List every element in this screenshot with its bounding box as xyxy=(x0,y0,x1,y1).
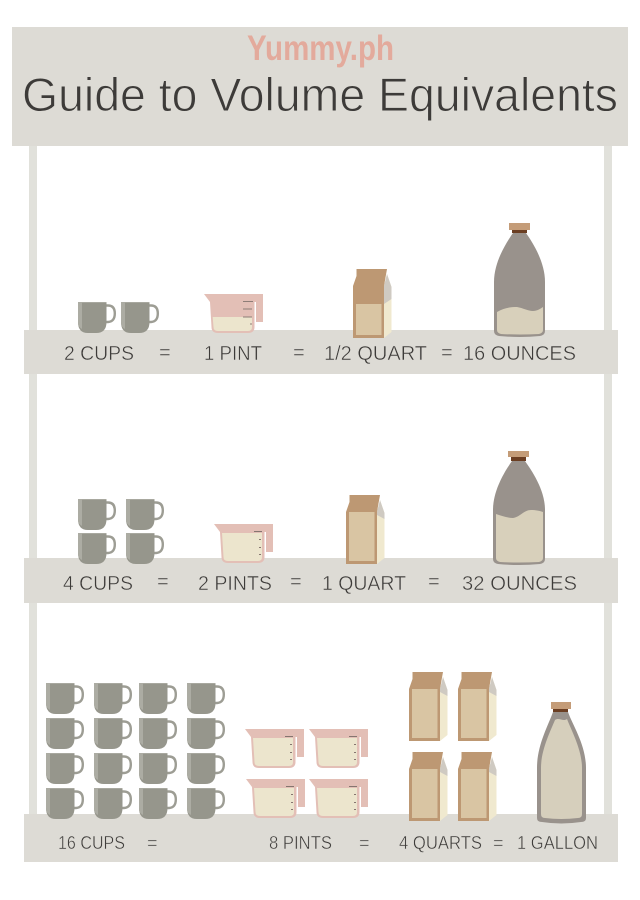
icon: 4 cups xyxy=(78,499,163,564)
title: Guide to Volume Equivalents xyxy=(22,68,618,121)
icon: quart carton xyxy=(346,495,384,564)
icon: bottle with 16 ounces xyxy=(494,223,545,337)
shelf post: left xyxy=(29,146,37,862)
equation row 3: = xyxy=(147,833,158,853)
equation row 3: 16 CUPS xyxy=(58,833,125,853)
equation row 2: = xyxy=(290,571,302,593)
equation row 1: 16 OUNCES xyxy=(463,343,576,365)
equation row 2: = xyxy=(428,571,440,593)
equation row 1 xyxy=(64,342,576,365)
icon: 2 cups xyxy=(78,302,158,333)
equation row 3: 8 PINTS xyxy=(269,833,332,853)
equation row 3 xyxy=(58,833,598,853)
icon: 16 cups xyxy=(46,683,224,819)
panel: header xyxy=(12,27,628,146)
icon: pint measuring jug xyxy=(204,294,263,333)
equation row 3: 4 QUARTS xyxy=(399,833,482,853)
icon: 4 quart cartons xyxy=(409,672,496,821)
equation row 1: 1 PINT xyxy=(204,343,262,365)
equation row 2: = xyxy=(157,571,169,593)
panel: shelf 1 xyxy=(24,223,618,374)
equation row 3: = xyxy=(493,833,504,853)
equation row 2: 2 PINTS xyxy=(198,573,272,595)
equation row 2 xyxy=(63,571,577,595)
icon: gallon bottle xyxy=(537,702,586,824)
equation row 1: = xyxy=(159,342,171,364)
equation row 3: 1 GALLON xyxy=(517,833,598,853)
shelf post: right xyxy=(604,146,612,862)
equation row 1: = xyxy=(293,342,305,364)
equation row 1: 1/2 QUART xyxy=(324,343,427,365)
panel: shelf 3 xyxy=(24,672,618,862)
icon: bottle with 32 ounces xyxy=(493,451,545,565)
icon: 8 pints measuring jugs xyxy=(245,729,368,818)
brand name: Yummy.ph xyxy=(247,29,394,68)
equation row 2: 4 CUPS xyxy=(63,573,133,595)
equation row 1: = xyxy=(441,342,453,364)
icon: 2 pints measuring jug xyxy=(214,524,273,563)
equation row 3: = xyxy=(359,833,370,853)
equation row 2: 32 OUNCES xyxy=(462,573,577,595)
equation row 1: 2 CUPS xyxy=(64,343,134,365)
equation row 2: 1 QUART xyxy=(322,573,406,595)
panel: shelf 2 xyxy=(24,451,618,603)
icon: half-quart carton xyxy=(353,269,392,338)
